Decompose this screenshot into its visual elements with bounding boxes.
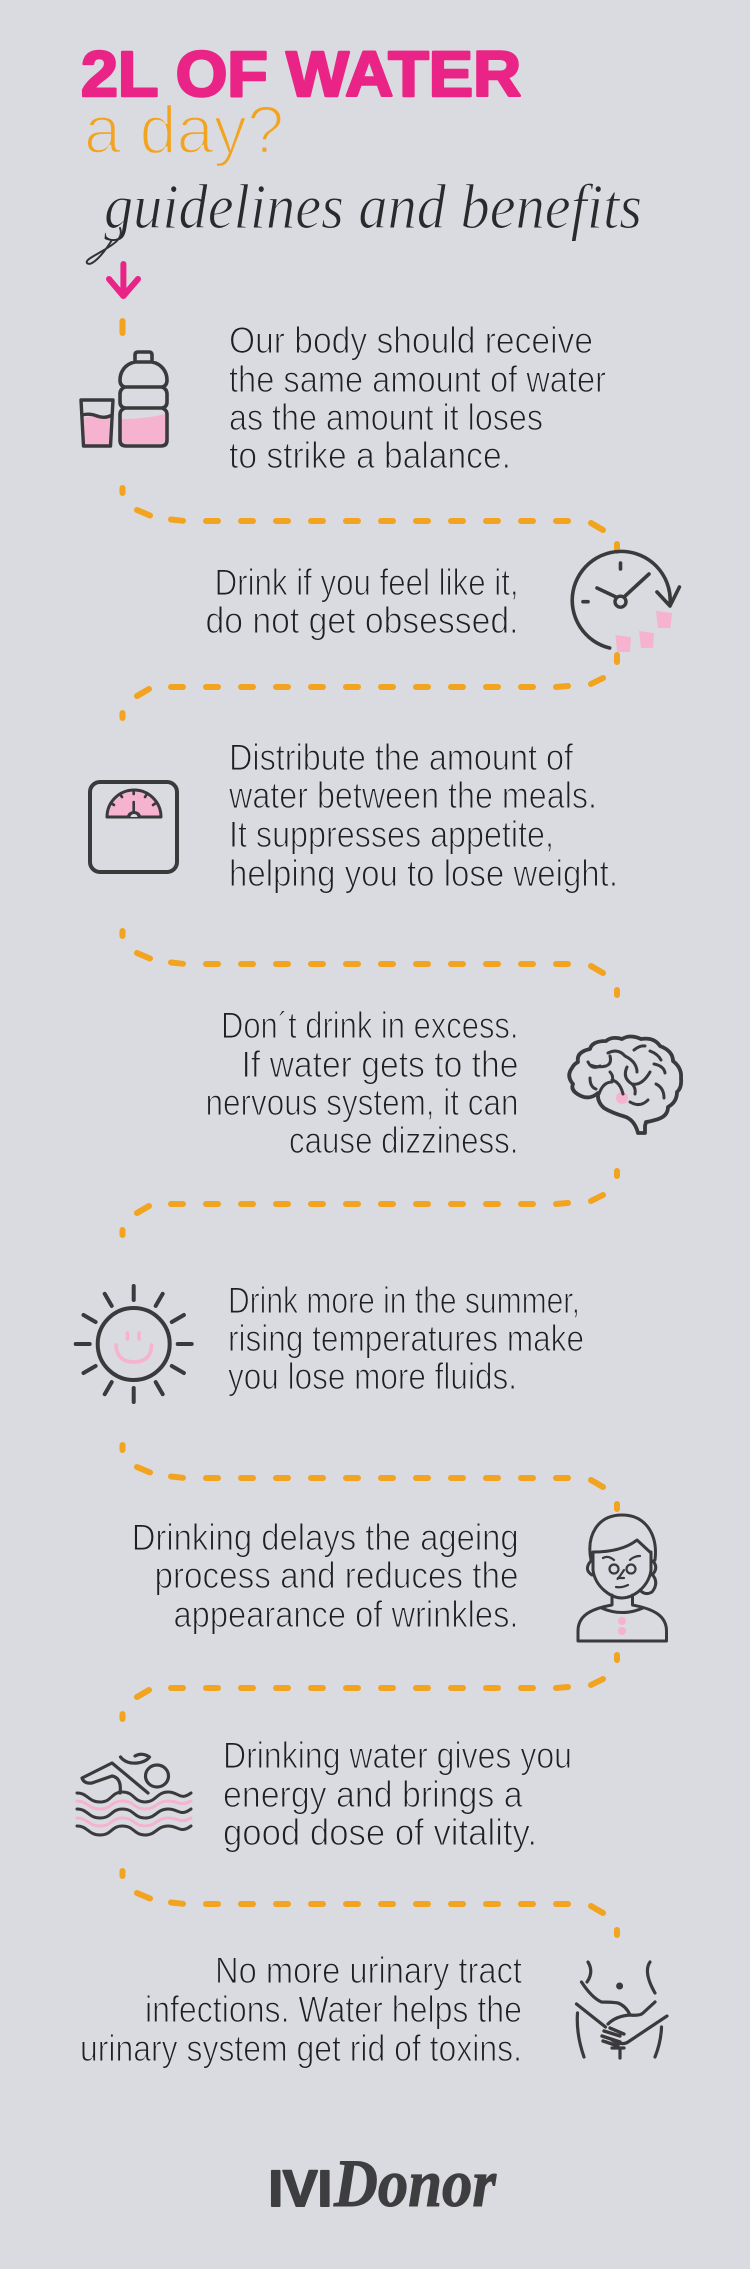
dashed path: first curve to right [122,488,617,551]
text block 7: good dose of vitality. [223,1812,537,1853]
icon: weighing scale [90,782,177,872]
text block 6: process and reduces the [154,1555,518,1596]
text block 6: appearance of wrinkles. [174,1594,518,1635]
arrow: pink down arrow [109,264,138,296]
text block 8 [80,1950,523,2069]
text block 5: Drink more in the summer, [228,1280,580,1321]
title: 2L OF WATER [81,38,521,110]
text block 3: helping you to lose weight. [229,853,618,894]
text block 4: If water gets to the [242,1044,518,1085]
text block 8: No more urinary tract [215,1950,523,1991]
icon: lower abdomen with hands [576,1962,667,2058]
text block 2: do not get obsessed. [206,600,518,641]
logo: IVI Donor [268,2145,496,2221]
icon: woman with glasses [578,1515,666,1641]
text block 1: as the amount it loses [229,397,543,438]
dashed path: third curve to right [122,931,617,995]
text block 3: It suppresses appetite, [229,814,554,855]
dashed path: sixth curve to left [122,1655,617,1719]
dashed path: seventh curve to right [122,1871,617,1935]
text block 4 [206,1005,518,1161]
text block 7: energy and brings a [223,1774,523,1815]
text block 8: infections. Water helps the [145,1989,522,2030]
text block 1 [229,320,606,476]
text block 6: Drinking delays the ageing [132,1517,519,1558]
script heading: guidelines and benefits: guidelines and benefits [104,171,642,242]
logo: IVI Donor: Donor [333,2145,496,2221]
icon: glass and bottle [81,352,167,446]
dashed path: fifth curve to right [122,1445,617,1509]
icon: swimmer and waves [77,1754,191,1835]
text block 8: urinary system get rid of toxins. [80,2028,522,2069]
icon: smiling sun [76,1286,192,1402]
text block 3: water between the meals. [228,775,597,816]
text block 4: nervous system, it can [206,1082,518,1123]
text block 3 [228,737,618,894]
dashed path: second curve to left [122,655,617,718]
logo: IVI Donor: IVI [268,2160,332,2217]
text block 5: you lose more fluids. [228,1356,517,1397]
subtitle: a day?: a day? [84,92,284,168]
text block 4: cause dizziness. [289,1120,518,1161]
script heading: guidelines and benefits [87,171,642,264]
text block 1: Our body should receive [229,320,593,361]
text block 7: Drinking water gives you [223,1735,572,1776]
text block 1: to strike a balance. [229,435,511,476]
text block 6 [132,1517,519,1635]
dashed path: fourth curve to left [122,1171,617,1235]
text block 1: the same amount of water [229,359,606,400]
icon: brain [569,1036,681,1133]
text block 2 [206,562,519,641]
text block 2: Drink if you feel like it, [215,562,519,603]
text block 5: rising temperatures make [228,1318,584,1359]
icon: clock with cups [572,551,679,652]
text block 5 [228,1280,584,1397]
text block 3: Distribute the amount of [229,737,574,778]
text block 7 [223,1735,572,1853]
dashed path: start [120,321,126,333]
text block 4: Don´t drink in excess. [221,1005,518,1046]
